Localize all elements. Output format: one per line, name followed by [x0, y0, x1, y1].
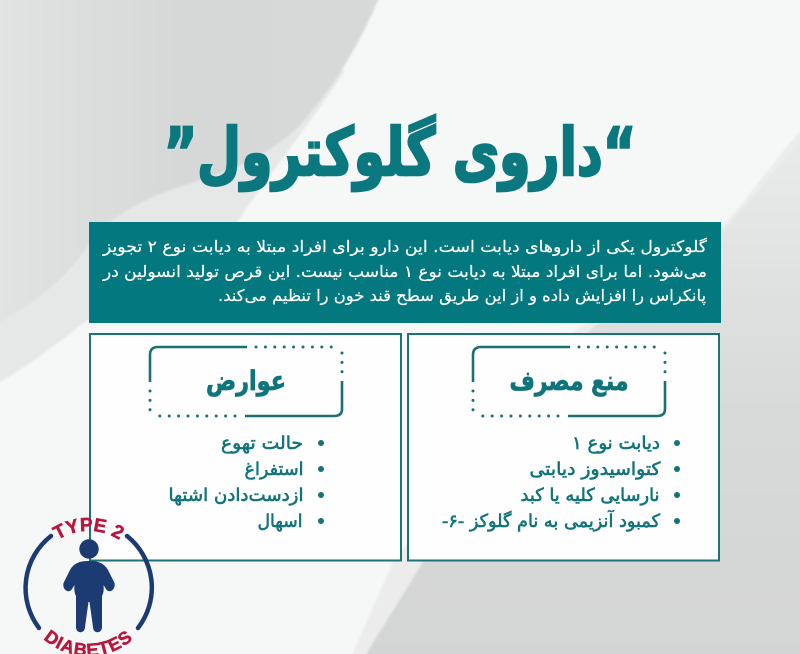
text block: description — [102, 237, 707, 306]
heading: contraindications: منع مصرف — [510, 366, 628, 397]
list: side effects: حالت تهوع — [221, 433, 303, 454]
panel: side effects — [90, 334, 401, 560]
text block: description: پانکراس را افزایش داده و از این طریق سطح قند خون را تنظیم می‌کند. — [218, 286, 706, 306]
list: contraindications: دیابت نوع ۱ — [572, 433, 660, 454]
badge ring — [26, 536, 152, 628]
panel: contraindications — [408, 334, 719, 560]
list: side effects: استفراغ — [244, 459, 304, 480]
title: “داروی گلوکترول” — [164, 114, 636, 192]
icon: person — [63, 539, 115, 632]
heading frame: side effects — [150, 347, 342, 416]
badge: type 2 diabetes — [23, 518, 154, 654]
heading: side effects: عوارض — [206, 366, 286, 397]
text block: description: می‌شود. اما برای افراد مبتلا به دیابت نوع ۱ مناسب نیست. این قرص تولید انسولین در — [102, 262, 707, 282]
badge text: type 2: TYPE 2 — [51, 518, 124, 540]
heading frame: contraindications — [473, 347, 665, 416]
list: contraindications: نارسایی کلیه یا کبد — [520, 485, 660, 506]
text block: description: گلوکترول یکی از داروهای دیابت است. این دارو برای افراد مبتلا به دیابت نوع ۲ تجویز — [102, 237, 707, 257]
panel: description banner — [89, 222, 721, 323]
list: contraindications: کتواسیدوز دیابتی — [530, 459, 661, 480]
list: side effects — [168, 433, 324, 532]
list: contraindications: کمبود آنزیمی به نام گلوکز -۶- — [442, 509, 660, 532]
list: side effects: ازدست‌دادن اشتها — [168, 485, 304, 506]
list: contraindications — [442, 433, 680, 532]
list: side effects: اسهال — [258, 511, 302, 532]
